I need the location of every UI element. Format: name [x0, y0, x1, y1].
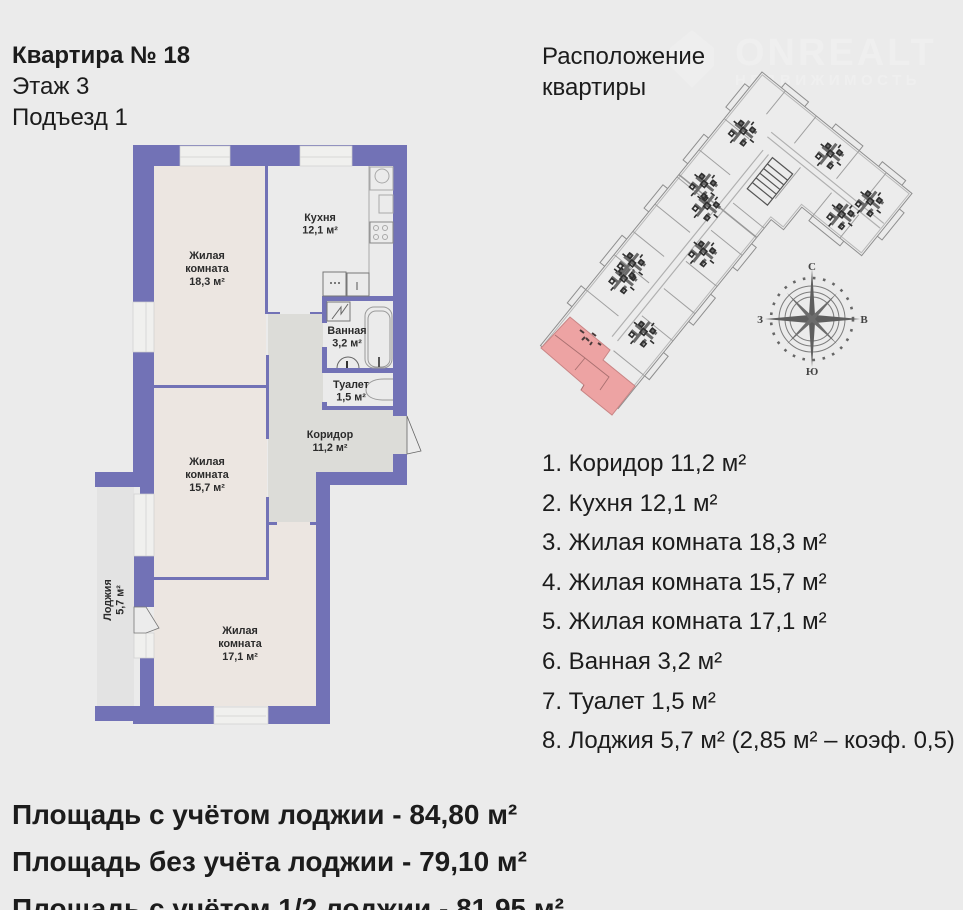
location heading: [542, 43, 705, 101]
bathroom fixtures: [327, 302, 393, 400]
label: kitchen: 12,1 м²: [302, 224, 338, 236]
compass rose: В: [860, 314, 868, 326]
apartment heading: Квартира № 18: [12, 42, 190, 69]
area totals: Площадь без учёта лоджии - 79,10 м²: [12, 846, 527, 877]
label: living room 15.7: Жилая: [189, 456, 225, 468]
label: loggia: 5,7 м²: [114, 585, 126, 615]
apartment heading: Этаж 3: [12, 73, 89, 100]
room list: [542, 450, 955, 754]
location heading: квартиры: [542, 74, 646, 101]
room: living room 15.7: [154, 387, 267, 578]
room partitions: [567, 72, 890, 417]
label: corridor: 11,2 м²: [312, 442, 348, 454]
room: living room 18.3: [154, 166, 266, 386]
label: living room 17.1: комната: [218, 638, 263, 650]
room list: 7. Туалет 1,5 м²: [542, 688, 716, 715]
label: toilet: 1,5 м²: [336, 392, 366, 404]
label: living room 18.3: комната: [185, 263, 230, 275]
label: living room 17.1: 17,1 м²: [222, 651, 258, 663]
compass rose: [757, 261, 868, 378]
label: loggia: Лоджия: [102, 579, 114, 621]
compass rose: Ю: [806, 366, 818, 378]
room: living room 17.1: [154, 522, 317, 706]
highlighted apartment: [541, 317, 635, 415]
stair and service core clusters: [582, 81, 898, 414]
label: bathroom: Ванная: [327, 325, 367, 337]
compass rose: С: [808, 261, 816, 273]
room list: 1. Коридор 11,2 м²: [542, 450, 746, 477]
room: corridor: [268, 314, 407, 522]
watermark: ONREALT: [735, 32, 937, 74]
apartment heading: [12, 42, 190, 131]
room: loggia: [97, 487, 134, 706]
label: living room 18.3: 18,3 м²: [189, 276, 225, 288]
label: living room 15.7: комната: [185, 469, 230, 481]
label: toilet: Туалет: [333, 379, 369, 391]
label: living room 17.1: Жилая: [222, 625, 258, 637]
label: kitchen: Кухня: [304, 212, 336, 224]
label: living room 18.3: Жилая: [189, 250, 225, 262]
room list: 6. Ванная 3,2 м²: [542, 648, 722, 675]
compass rose: З: [757, 314, 763, 326]
room list: 5. Жилая комната 17,1 м²: [542, 608, 827, 635]
building outline: [536, 64, 920, 471]
room list: 8. Лоджия 5,7 м² (2,85 м² – коэф. 0,5): [542, 727, 955, 754]
watermark: НЕДВИЖИМОСТЬ: [735, 72, 921, 89]
room list: 3. Жилая комната 18,3 м²: [542, 529, 827, 556]
label: corridor: Коридор: [307, 429, 353, 441]
label: living room 15.7: 15,7 м²: [189, 482, 225, 494]
location heading: Расположение: [542, 43, 705, 70]
kitchen fixtures: [323, 166, 393, 296]
area totals: [12, 799, 564, 910]
area totals: Площадь с учётом лоджии - 84,80 м²: [12, 799, 517, 830]
apartment heading: Подъезд 1: [12, 104, 128, 131]
windows: [133, 146, 352, 724]
room: bath and toilet: [327, 301, 393, 406]
label: bathroom: 3,2 м²: [332, 338, 362, 350]
corridor lines: [608, 132, 884, 425]
walls: [95, 145, 407, 724]
room list: 2. Кухня 12,1 м²: [542, 490, 717, 517]
door: loggia: [134, 607, 159, 633]
room: kitchen: [268, 166, 393, 314]
room list: 4. Жилая комната 15,7 м²: [542, 569, 827, 596]
door: entrance: [407, 416, 421, 454]
